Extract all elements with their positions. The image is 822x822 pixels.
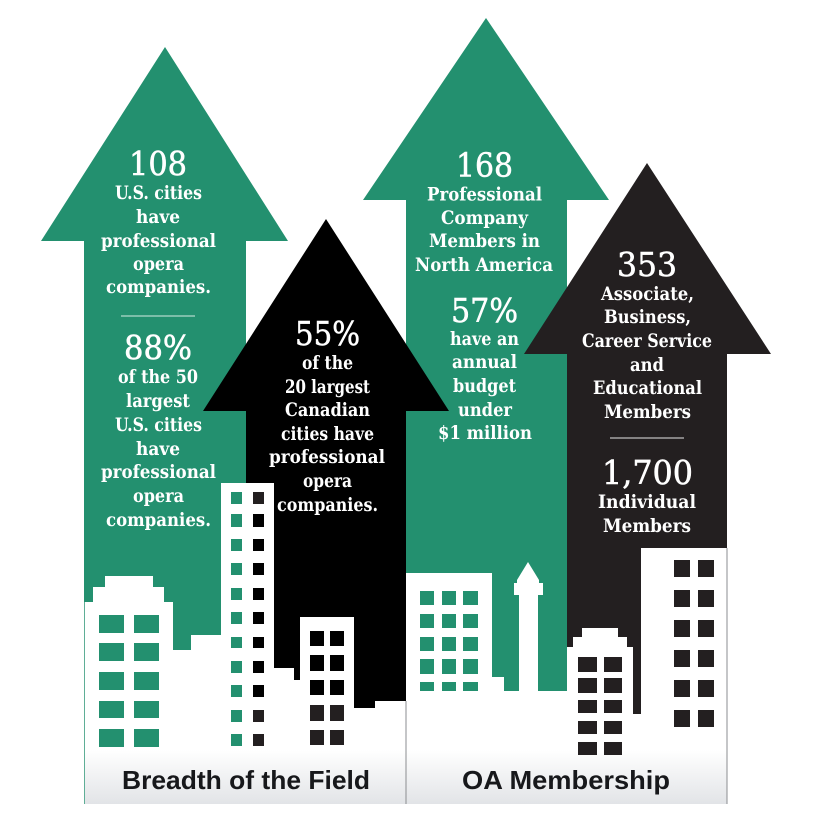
- text block: 108 U.S. cities: professional: [101, 231, 216, 252]
- text block: 88% of the 50 largest: companies.: [106, 510, 211, 531]
- text block: 57% annual budget: $1 million: [438, 423, 532, 444]
- text block: 353 Associate members: 353: [617, 245, 677, 284]
- text block: 108 U.S. cities: have: [136, 207, 180, 228]
- text block: 353 Associate members: Career Service: [582, 331, 712, 352]
- arrow: green left: [41, 47, 288, 760]
- text block: 1,700 Individual Members: Individual: [598, 492, 696, 513]
- text block: 1,700 Individual Members: Members: [603, 516, 691, 537]
- text block: 168 Professional Company Members: Members in: [429, 231, 540, 252]
- text block: 108 U.S. cities: U.S. cities: [115, 183, 202, 204]
- text block: 55% Canadian cities: cities have: [281, 424, 374, 445]
- building windows: left green building: [99, 615, 159, 747]
- text block: 168 Professional Company Members: 168: [456, 146, 513, 184]
- arrow: black left: [203, 219, 449, 760]
- text block: 108 U.S. cities: opera: [133, 254, 184, 275]
- text block: 57% annual budget: under: [458, 400, 512, 421]
- text block: 57% annual budget: [438, 291, 532, 444]
- text block: 353 Associate members: and: [630, 355, 664, 376]
- divider: left green arrow: [121, 316, 195, 317]
- text block: 55% Canadian cities: 55%: [295, 314, 360, 353]
- text block: 88% of the 50 largest: professional: [101, 462, 216, 483]
- text block: 55% Canadian cities: 20 largest: [285, 377, 370, 398]
- text block: 108 U.S. cities: [101, 144, 216, 298]
- text block: 55% Canadian cities: Canadian: [285, 400, 370, 421]
- text block: 88% of the 50 largest: largest: [126, 391, 190, 412]
- text block: 57% annual budget: annual: [452, 352, 517, 373]
- building windows: small black building: [310, 631, 344, 745]
- text block: 55% Canadian cities: professional: [269, 447, 385, 468]
- text block: 55% Canadian cities: of the: [302, 353, 353, 374]
- text block: 353 Associate members: Business,: [604, 307, 691, 328]
- text block: 88% of the 50 largest: of the 50: [118, 367, 198, 388]
- text block: 353 Associate members: Associate,: [600, 284, 694, 305]
- text block: 353 Associate members: [582, 245, 712, 423]
- text block: 57% annual budget: have an: [450, 329, 519, 350]
- text block: 57% annual budget: budget: [453, 376, 516, 397]
- panel edge lines: [84, 548, 728, 804]
- city skyline silhouette: [84, 483, 727, 804]
- footer gradient band: [84, 750, 727, 804]
- tower windows: black column: [253, 492, 264, 746]
- text block: 88% of the 50 largest: [101, 328, 216, 531]
- divider: right black arrow: [610, 438, 684, 439]
- text block: 57% annual budget: 57%: [451, 291, 518, 330]
- text block: 353 Associate members: Educational: [593, 378, 702, 399]
- building windows: dark stepped building: [578, 657, 622, 755]
- building windows: right tall building: [674, 560, 714, 727]
- text block: 168 Professional Company Members: North America: [415, 255, 553, 276]
- text block: 168 Professional Company Members: Professional: [427, 184, 542, 206]
- text block: 1,700 Individual Members: [598, 453, 696, 537]
- heading: OA Membership: OA Membership: [462, 765, 670, 795]
- text block: 88% of the 50 largest: opera: [133, 486, 184, 507]
- text block: 353 Associate members: Members: [604, 402, 691, 423]
- text block: 55% Canadian cities: [269, 314, 385, 516]
- text block: 55% Canadian cities: opera: [303, 471, 352, 492]
- text block: 1,700 Individual Members: 1,700: [602, 453, 693, 492]
- text block: 168 Professional Company Members: [415, 146, 553, 276]
- text block: 108 U.S. cities: companies.: [106, 277, 211, 298]
- arrow: green right: [363, 18, 609, 760]
- tower windows: green column: [231, 492, 242, 746]
- building windows: green office block: [420, 591, 478, 691]
- text block: 55% Canadian cities: companies.: [277, 495, 378, 516]
- text block: 168 Professional Company Members: Company: [441, 208, 529, 229]
- text block: 88% of the 50 largest: U.S. cities: [115, 415, 202, 436]
- text block: 88% of the 50 largest: have: [136, 439, 180, 460]
- arrow: black right: [524, 163, 771, 760]
- text block: 108 U.S. cities: 108: [129, 144, 187, 183]
- heading: Breadth of the Field: Breadth of the Field: [122, 765, 370, 795]
- text block: 88% of the 50 largest: 88%: [124, 328, 192, 367]
